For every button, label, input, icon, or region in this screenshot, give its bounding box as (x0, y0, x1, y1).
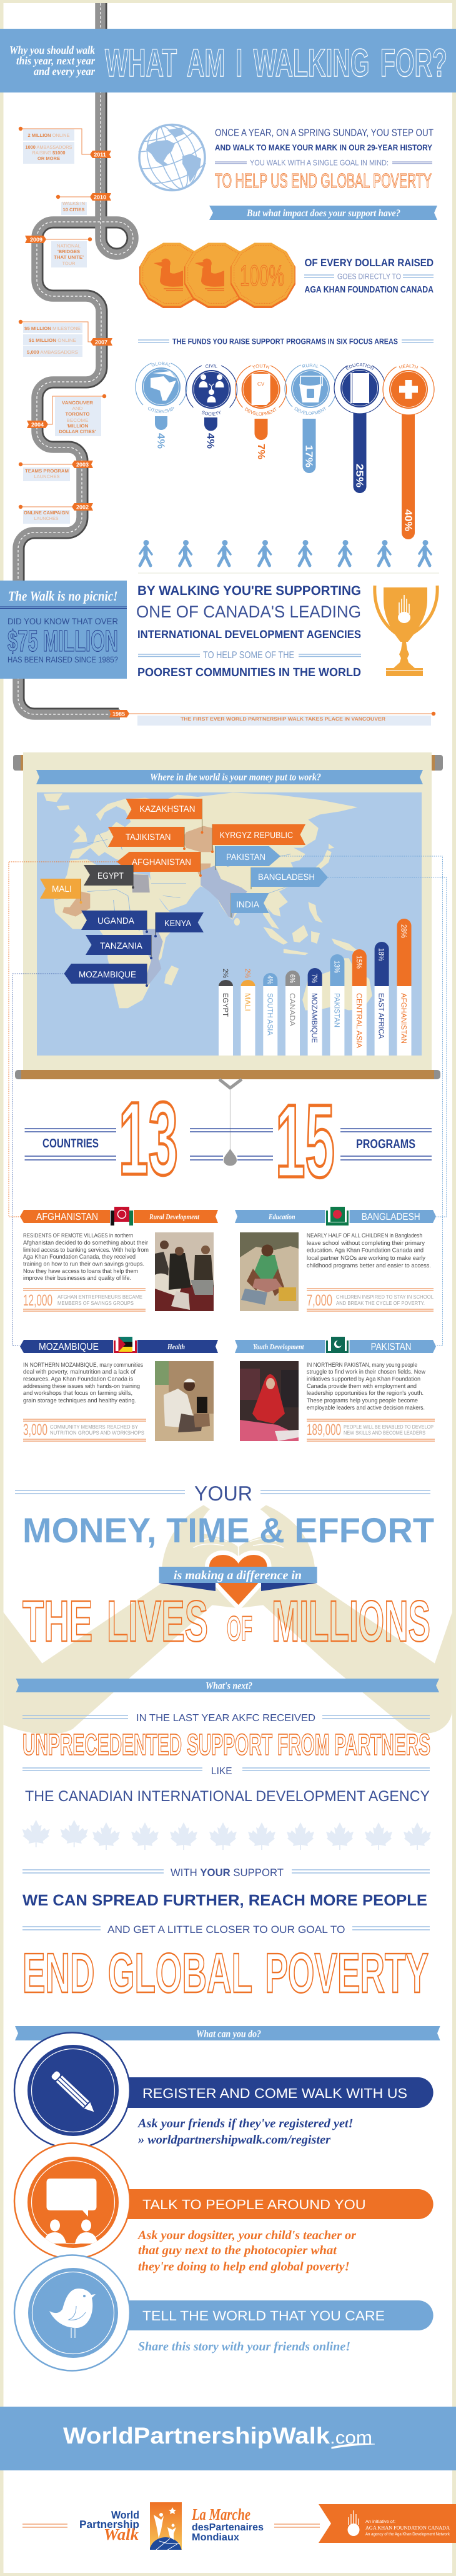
paragraph: Pakistan: IN NORTHERN PAKISTAN, many young people (307, 1362, 417, 1369)
stat: 13 countries and 15 programs: 15 (275, 1084, 335, 1199)
call to action: tell the world: Share this story with your friends online! (138, 2340, 350, 2354)
timeline milestone 2010: 10 CITIES (62, 207, 85, 212)
paragraph: Pakistan: initiatives supported by Aga Khan Foundation (307, 1376, 420, 1382)
dollar text block: GOES DIRECTLY TO (337, 272, 401, 281)
flag: Kyrgyz Republic: KYRGYZ REPUBLIC (220, 830, 293, 840)
icon: pull-cord drop (224, 1149, 237, 1166)
focus: education 25%: EDUCATION (345, 362, 374, 370)
paragraph: Bangladesh: childhood programs better and easier to access. (307, 1262, 431, 1269)
flag: Kenya (154, 912, 204, 937)
timeline milestone 2007: 5,000 AMBASSADORS (27, 349, 78, 355)
stat: 7,000: 7,000 (307, 1292, 332, 1309)
ribbon: impact question: But what impact does your support have? (246, 208, 400, 219)
stat: 3,000: COMMUNITY MEMBERS REACHED BY (50, 1424, 138, 1430)
timeline milestone 2009: 'BRIDGES (57, 249, 80, 254)
program: Mozambique (20, 1337, 218, 1441)
focus: youth development 7% (235, 364, 287, 459)
timeline milestone 2010: WALKS IN (62, 201, 85, 206)
call to action: talk: that guy next to the photocopier what (138, 2244, 337, 2257)
ribbon: what's next: What's next? (206, 1681, 252, 1691)
timeline milestone 2011: 1000 AMBASSADORS (25, 144, 72, 150)
timeline milestone 2011 (19, 127, 111, 164)
timeline milestone 2004: 2004 (31, 421, 44, 427)
stat: 12,000: MEMBERS OF SAVINGS GROUPS (57, 1300, 134, 1306)
logo: La Marche des Partenaires Mondiaux: Mondiaux (192, 2532, 239, 2543)
flag: Kyrgyz Republic (211, 824, 305, 853)
supporting text block: BY WALKING YOU'RE SUPPORTING (137, 584, 361, 598)
icon row: walkers (138, 540, 439, 573)
ribbon: what can you do (15, 2026, 440, 2040)
bar: Mali 2% (241, 969, 255, 1056)
flag: Bangladesh: BANGLADESH (258, 872, 315, 882)
flag: India: INDIA (236, 899, 260, 909)
ribbon: impact question (209, 206, 437, 220)
bar: South Asia 4% (263, 973, 277, 1056)
icon: trophy (375, 586, 437, 676)
focus: global citizenship 4% (135, 361, 187, 449)
footer band: website: .com (330, 2428, 372, 2447)
focus: health 40%: 40% (402, 509, 414, 531)
flag: Afghanistan (117, 852, 202, 877)
ribbon: Afghanistan: AFGHANISTAN (36, 1212, 98, 1222)
focus: global citizenship 4%: CITIZENSHIP (147, 407, 174, 414)
timeline milestone 2011: 2011 (94, 151, 106, 157)
flag: India (231, 893, 269, 917)
icon: globe (130, 115, 214, 200)
flag: Tajikistan: TAJIKISTAN (126, 832, 171, 842)
logo ribbon: Aga Khan Foundation Canada (319, 2504, 456, 2543)
timeline milestone 2007: $5 MILLION MILESTONE (24, 326, 81, 331)
call to action: talk: they're doing to help end global poverty! (138, 2260, 350, 2274)
logo: World Partnership Walk: Partnership (79, 2519, 139, 2530)
dollar text block: OF EVERY DOLLAR RAISED (305, 257, 434, 269)
focus: youth development 7%: YOUTH (252, 364, 270, 369)
paragraph: Afghanistan (23, 1232, 149, 1282)
timeline milestone 2003: TEAMS PROGRAM (25, 468, 69, 474)
paragraph: Mozambique: resources. Aga Khan Foundation Canada is (23, 1376, 133, 1382)
timeline milestone 1985: 1985 (112, 711, 125, 717)
bar: Central Asia 15%: CENTRAL ASIA (355, 993, 364, 1048)
intro text block (215, 127, 434, 192)
ribbon: where in the world: Where in the world is your money put to work? (150, 772, 321, 782)
flag: Egypt: EGYPT (97, 871, 124, 881)
dollar text block: AGA KHAN FOUNDATION CANADA (305, 285, 434, 295)
supporting text block (136, 584, 361, 679)
bar: Canada 6% (285, 971, 300, 1056)
timeline milestone 2004: AND (72, 406, 83, 411)
stat: 7,000: AND BREAK THE CYCLE OF POVERTY. (336, 1300, 425, 1306)
call to action: tell the world (14, 2255, 434, 2371)
timeline milestone 2002 (19, 503, 93, 524)
bar: Afghanistan 28%: 28% (400, 924, 409, 938)
timeline milestone 2010: 2010 (94, 194, 106, 200)
flag: Kazakhstan: KAZAKHSTAN (139, 804, 195, 814)
flag: Tanzania: TANZANIA (100, 941, 143, 951)
stat: 13 countries and 15 programs (25, 1081, 432, 1199)
intro text block: AND WALK TO MAKE YOUR MARK IN OUR 29-YEAR HISTORY (215, 142, 432, 152)
focus: rural development 17%: 17% (304, 445, 314, 467)
timeline milestone 2003 (19, 461, 93, 481)
heading: the lives of millions: THE LIVES (22, 1589, 208, 1654)
supporting text block: TO HELP SOME OF THE (203, 650, 294, 661)
flag: Egypt (84, 865, 134, 889)
paragraph: Afghanistan: Aga Khan Foundation Canada, they received (23, 1254, 136, 1261)
paragraph: Afghanistan: limited access to banking services. With help from (23, 1247, 149, 1254)
timeline milestone 1985: THE FIRST EVER WORLD PARTNERSHIP WALK TAKES PLACE IN VANCOUVER (181, 716, 385, 722)
program: Bangladesh (235, 1207, 436, 1311)
panel: the walk is no picnic: $75 MILLION (7, 625, 118, 658)
paragraph: Afghanistan: Now they have access to loans that help them (23, 1268, 138, 1275)
stat: 7,000 (307, 1289, 434, 1311)
logo: World Partnership Walk: World (111, 2509, 139, 2521)
coin: 100%: 100% (240, 259, 284, 292)
ribbon: Mozambique: Health (167, 1342, 185, 1351)
chart: spending by region (219, 919, 411, 1056)
flag: Kazakhstan (126, 799, 204, 834)
timeline milestone 2003: LAUNCHES (34, 474, 60, 479)
focus: rural development 17% (284, 364, 335, 473)
bar: Mali 2%: MALI (244, 993, 252, 1011)
bar: Egypt 2%: EGYPT (221, 993, 230, 1017)
call to action: register (14, 2032, 434, 2149)
icon row: maple leaves (22, 1820, 431, 1850)
timeline milestone 2009: 2009 (30, 236, 42, 242)
scroll bottom roller (15, 1070, 440, 1088)
goal text block: AND GET A LITTLE CLOSER TO OUR GOAL TO (107, 1924, 345, 1935)
photo: Afghan savings group (155, 1232, 214, 1311)
stat: 13 countries and 15 programs: PROGRAMS (356, 1137, 415, 1151)
flag: Mozambique: MOZAMBIQUE (79, 969, 136, 979)
focus: health 40% (382, 364, 435, 539)
timeline milestone 2009: NATIONAL (57, 243, 81, 249)
ribbon: Bangladesh (235, 1210, 436, 1223)
bar: East Africa 18% (375, 942, 389, 1056)
paragraph: Pakistan: leadership opportunities for the region's youth. (307, 1390, 424, 1397)
focus: civil society 4% (185, 364, 237, 449)
timeline milestone 2010 (56, 193, 111, 215)
bar: Mali 2%: 2% (244, 969, 252, 978)
call to action: tell the world: TELL THE WORLD THAT YOU CARE (142, 2308, 385, 2324)
heading: money, time and effort: MONEY, TIME & EFFORT (22, 1510, 434, 1550)
ribbon: where in the world (36, 770, 423, 784)
timeline milestone 2011: RAISING $1000 (32, 150, 65, 156)
stat: 189,000 (307, 1419, 435, 1441)
photo: Mozambique farmer (155, 1361, 214, 1441)
logo: La Marche des Partenaires Mondiaux: La Marche (191, 2505, 250, 2524)
header subtitle: Why you should walk (9, 44, 95, 56)
call to action: talk: Ask your dogsitter, your child's teacher or (137, 2229, 356, 2242)
icon: pencil (51, 2070, 97, 2115)
flag: Mali: MALI (52, 884, 72, 894)
ribbon: Afghanistan (20, 1210, 218, 1223)
flag: Tanzania (86, 935, 152, 959)
bar: Mozambique 7% (308, 968, 322, 1056)
paragraph: Bangladesh: NEARLY HALF OF ALL CHILDREN in Bangladesh (307, 1232, 422, 1239)
call to action: talk (14, 2144, 434, 2274)
focus: youth development 7%: DEVELOPMENT (245, 407, 276, 416)
paragraph: Afghanistan: Afghanistan decided to do something about their (23, 1240, 148, 1246)
timeline milestone 2002: LAUNCHES (34, 516, 59, 521)
call to action: register: » worldpartnershipwalk.com/register (137, 2133, 330, 2147)
flag: Mozambique (64, 964, 148, 987)
focus: global citizenship 4%: GLOBAL (151, 361, 171, 367)
ribbon: Mozambique: MOZAMBIQUE (39, 1342, 99, 1352)
stat: 3,000: 3,000 (23, 1421, 47, 1439)
bar: Pakistan 13%: PAKISTAN (332, 993, 341, 1027)
dotted connectors (9, 856, 447, 1345)
heading: six focus areas: THE FUNDS YOU RAISE SUPPORT PROGRAMS IN SIX FOCUS AREAS (172, 337, 398, 346)
paragraph: Pakistan: These programs help young people become (307, 1397, 418, 1404)
photo: Bangladesh child (240, 1232, 299, 1311)
stat: 12,000: AFGHAN ENTREPRENEURS BECAME (57, 1294, 142, 1300)
timeline milestone 2004: BECOME (66, 417, 89, 423)
focus: rural development 17%: RURAL (302, 364, 319, 369)
focus: rural development 17%: DEVELOPMENT (294, 406, 326, 415)
call to action: register: Ask your friends if they've registered yet! (137, 2117, 354, 2130)
panel: scroll map (9, 752, 447, 1345)
header band (0, 29, 456, 92)
focus: civil society 4%: 4% (205, 433, 216, 449)
paragraph: Afghanistan: training on how to run their own savings groups. (23, 1261, 144, 1267)
program: Afghanistan (20, 1207, 299, 1311)
panel: the walk is no picnic: HAS BEEN RAISED SINCE 1985? (7, 655, 118, 664)
illustration: hands forming heart (4, 1505, 452, 1734)
bar: East Africa 18%: EAST AFRICA (377, 993, 386, 1039)
stat: 12,000: 12,000 (23, 1292, 52, 1309)
bar: South Asia 4%: SOUTH ASIA (265, 993, 274, 1036)
focus: youth development 7%: 7% (255, 444, 266, 459)
paragraph: Mozambique (23, 1362, 143, 1404)
timeline milestone 2007: 2007 (95, 339, 107, 345)
stat: 189,000: PEOPLE WILL BE ENABLED TO DEVELOP (344, 1424, 434, 1430)
flag icon: Afghanistan (111, 1207, 133, 1226)
logo: La Marche des Partenaires Mondiaux (191, 2505, 320, 2543)
paragraph: Mozambique: IN NORTHERN MOZAMBIQUE, many communities (23, 1362, 143, 1369)
coin: loon 2 (184, 243, 249, 308)
flag: Uganda: UGANDA (97, 916, 135, 926)
partners text block (22, 1713, 430, 1805)
icon: bird (49, 2289, 96, 2338)
timeline milestone 2004 (27, 394, 106, 436)
stat: 13 countries and 15 programs: 13 (119, 1081, 178, 1197)
bar: Egypt 2% (219, 969, 233, 1056)
photo: Pakistani woman (240, 1361, 299, 1441)
bar: Pakistan 13%: 13% (332, 961, 341, 973)
paragraph: Afghanistan: improve their businesses and quality of life. (23, 1275, 131, 1282)
focus: health 40%: HEALTH (399, 364, 419, 369)
ribbon: what's next (16, 1679, 439, 1692)
flag icon: Bangladesh (326, 1207, 349, 1226)
timeline milestone 2007: $1 MILLION ONLINE (29, 337, 76, 343)
timeline milestone 2002: 2002 (76, 504, 89, 510)
stat: 12,000 (23, 1289, 146, 1311)
stat: 3,000: NUTRITION GROUPS AND WORKSHOPS (50, 1430, 144, 1436)
ribbon: making a difference: is making a difference in (174, 1569, 302, 1582)
heading: your (15, 1482, 430, 1505)
flag icon: Mozambique (114, 1337, 137, 1353)
logo: emblem (150, 2502, 182, 2550)
bar: Canada 6%: 6% (288, 974, 297, 983)
bar: Mozambique 7%: 7% (310, 974, 319, 983)
logo: World Partnership Walk: Walk (104, 2525, 139, 2544)
logo ribbon: Aga Khan Foundation Canada: AGA KHAN FOUNDATION CANADA (365, 2525, 450, 2531)
supporting text block: ONE OF CANADA'S LEADING (136, 602, 361, 621)
paragraph: Afghanistan: RESIDENTS OF REMOTE VILLAGES in northern (23, 1232, 133, 1239)
logo ribbon: Aga Khan Foundation Canada: An initiative of: (365, 2519, 395, 2524)
bar: Egypt 2%: 2% (221, 969, 230, 978)
stat: 3,000 (23, 1419, 146, 1441)
partners text block: THE CANADIAN INTERNATIONAL DEVELOPMENT AGENCY (25, 1788, 430, 1805)
timeline milestone 2004: TORONTO (65, 411, 90, 417)
flag: Bangladesh (251, 867, 328, 889)
focus: civil society 4%: CIVIL (206, 364, 217, 369)
focus: education 25% (334, 362, 385, 493)
timeline milestone 2002: ONLINE CAMPAIGN (24, 510, 69, 516)
focus: global citizenship 4%: 4% (155, 433, 166, 449)
icon: speech bubble and listeners (44, 2179, 97, 2244)
heading: the lives of millions: OF (227, 1609, 252, 1648)
dollar text block (304, 257, 434, 295)
timeline milestone 2004: 'MILLION (66, 423, 89, 429)
flag: Kenya: KENYA (164, 918, 192, 928)
flag: Mali (40, 879, 82, 904)
bar: South Asia 4%: 4% (265, 976, 274, 984)
timeline milestone 2007 (19, 320, 112, 357)
timeline milestone 2004: DOLLAR CITIES' (59, 429, 96, 434)
paragraph: Bangladesh: leave school without completing their primary (307, 1240, 425, 1247)
timeline milestone 2009: THAT UNITE' (54, 254, 84, 260)
goal text block (22, 1867, 430, 2005)
bar: Mozambique 7%: MOZAMBIQUE (310, 993, 319, 1043)
paragraph: Mozambique: deal with poverty, malnutrition and a lack of (23, 1369, 136, 1375)
partners text block: IN THE LAST YEAR AKFC RECEIVED (136, 1713, 315, 1724)
timeline milestone 2011: OR MORE (37, 156, 60, 161)
logo: La Marche des Partenaires Mondiaux: desPartenaires (192, 2522, 264, 2533)
ribbon: Pakistan: Youth Development (253, 1342, 304, 1351)
program: Pakistan (235, 1337, 436, 1441)
footer band: website (0, 2407, 456, 2470)
paragraph: Pakistan (307, 1362, 425, 1411)
paragraph: Bangladesh (307, 1232, 431, 1269)
ribbon: Mozambique (20, 1340, 218, 1353)
goal text block: WITH YOUR SUPPORT (171, 1867, 284, 1879)
partners text block: LIKE (211, 1766, 232, 1777)
stat: 13 countries and 15 programs: COUNTRIES (42, 1137, 99, 1151)
bar: Central Asia 15% (352, 949, 367, 1056)
logo: World Partnership Walk (22, 2509, 139, 2544)
flag icon: Pakistan (326, 1337, 349, 1353)
panel: the walk is no picnic (0, 581, 127, 679)
supporting text block: POOREST COMMUNITIES IN THE WORLD (137, 666, 361, 679)
scroll top roller (13, 755, 443, 771)
call to action: talk: TALK TO PEOPLE AROUND YOU (142, 2197, 366, 2212)
footer band: website: WorldPartnershipWalk (63, 2423, 330, 2449)
timeline road (17, 3, 134, 715)
stat: 189,000: 189,000 (307, 1421, 341, 1439)
paragraph: Pakistan: Canada provide them with employment and (307, 1383, 417, 1390)
bar: Pakistan 13% (330, 954, 344, 1056)
focus: civil society 4%: SOCIETY (202, 411, 221, 416)
flag: Afghanistan: AFGHANISTAN (132, 857, 191, 867)
timeline milestone 2003: 2003 (76, 461, 89, 467)
flag: Uganda (81, 911, 148, 933)
ribbon: Bangladesh: Education (268, 1212, 295, 1221)
ribbon: Afghanistan: Rural Development (149, 1212, 200, 1221)
icon: coins (139, 243, 295, 308)
panel: the walk is no picnic: DID YOU KNOW THAT OVER (7, 616, 118, 626)
stat: 189,000: NEW SKILLS AND BECOME LEADERS (344, 1430, 425, 1436)
ribbon: Pakistan: PAKISTAN (371, 1342, 412, 1352)
goal text block: WE CAN SPREAD FURTHER, REACH MORE PEOPLE (22, 1892, 427, 1909)
icon: heart (159, 1555, 317, 1605)
stat: 7,000: CHILDREN INSPIRED TO STAY IN SCHOOL (336, 1294, 434, 1300)
flag: Tajikistan (108, 827, 186, 850)
header subtitle: this year, next year (16, 54, 96, 67)
heading: your: YOUR (194, 1482, 252, 1505)
focus: youth development 7%: CV (257, 381, 265, 387)
bar: Afghanistan 28% (397, 919, 411, 1056)
paragraph: Mozambique: grain storage techniques and healthy eating. (23, 1397, 136, 1404)
coin: loon 1 (139, 243, 204, 308)
paragraph: Mozambique: and workshops that focus on farming skills, (23, 1390, 132, 1397)
ribbon: what can you do: What can you do? (196, 2029, 261, 2040)
timeline milestone 2011: 2 MILLION ONLINE (27, 132, 70, 138)
timeline milestone 1985 (109, 710, 435, 726)
map (37, 792, 422, 1056)
intro text block: YOU WALK WITH A SINGLE GOAL IN MIND: (250, 159, 389, 167)
flag: Pakistan: PAKISTAN (226, 852, 265, 862)
timeline milestone 2004: VANCOUVER (62, 400, 94, 406)
ribbon: Bangladesh: BANGLADESH (362, 1212, 420, 1222)
call to action: register: REGISTER AND COME WALK WITH US (142, 2085, 407, 2101)
paragraph: Bangladesh: local partner NGOs are working to make early (307, 1255, 425, 1262)
paragraph: Pakistan: struggle to find work in their chosen fields. New (307, 1369, 425, 1375)
panel: the walk is no picnic: The Walk is no picnic! (8, 588, 117, 604)
bar: Central Asia 15%: 15% (355, 956, 364, 969)
flag: Pakistan (215, 846, 280, 870)
timeline milestone 2009: TOUR (62, 261, 76, 266)
paragraph: Pakistan: employable leaders and active decision makers. (307, 1405, 425, 1411)
coin: 100% (230, 243, 295, 308)
bar: Canada 6%: CANADA (288, 993, 297, 1026)
focus: education 25%: 25% (354, 464, 365, 487)
timeline milestone 2009 (25, 236, 92, 267)
chart: focus area bars (135, 361, 435, 539)
header subtitle: and every year (34, 65, 96, 77)
header subtitle (9, 44, 96, 77)
paragraph: Bangladesh: education. Aga Khan Foundation Canada and (307, 1247, 424, 1254)
bar: Afghanistan 28%: AFGHANISTAN (400, 993, 409, 1044)
ribbon: making a difference (159, 1567, 317, 1583)
paragraph: Mozambique: addressing these issues with hands-on training (23, 1383, 140, 1390)
supporting text block: INTERNATIONAL DEVELOPMENT AGENCIES (137, 628, 361, 641)
bar: East Africa 18%: 18% (377, 948, 386, 961)
ribbon: Pakistan (235, 1340, 436, 1353)
